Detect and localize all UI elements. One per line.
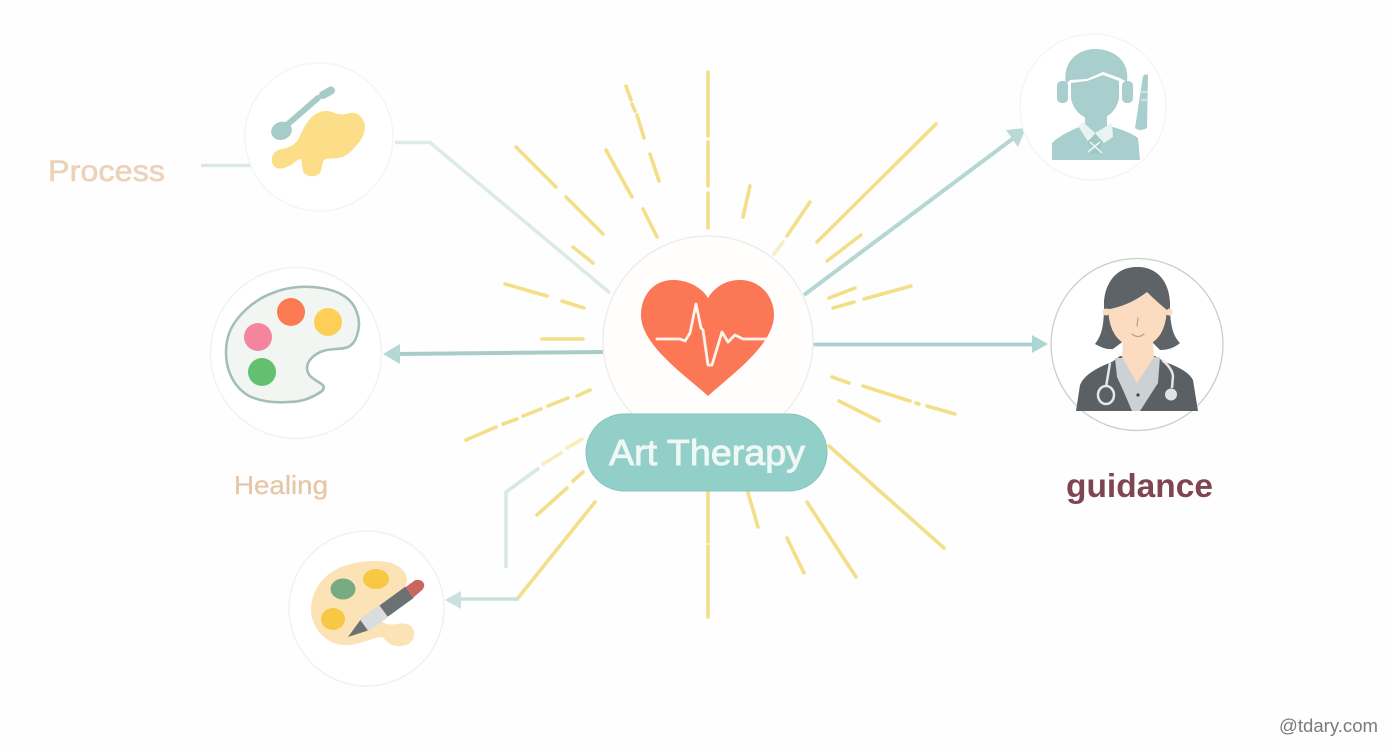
connector: elbow above brush palette [506,468,539,568]
face [1108,280,1167,348]
paint dots [244,298,342,386]
arrow: to doctor [813,335,1048,353]
sunburst rays [466,72,955,617]
shirt [1115,357,1160,411]
connector: process label to circle [201,164,250,167]
neck [1122,340,1154,383]
microphone [1135,74,1148,130]
stethoscope [1106,363,1110,387]
panel: process circle [245,63,393,211]
icon: paint blob [272,111,365,176]
panel: healing palette circle [210,268,382,438]
arrow: to brush palette [445,591,519,609]
panel: headset person circle [1020,34,1166,180]
watermark: @tdary.com [1279,716,1378,736]
arrow: to healing palette [383,344,603,364]
panel: brush palette circle [289,531,444,686]
connector: process to center [395,142,610,293]
icon: wooden palette [311,561,414,646]
icon: heart [641,280,774,396]
label: Process: Process [48,155,165,188]
icon: spoon [269,90,331,143]
icon: paint brush [344,576,428,643]
icon: palette [226,287,359,402]
hair back [1095,267,1180,350]
icon: headset person [1052,49,1148,160]
fringe [1104,267,1170,310]
paint dots [321,569,389,630]
panel: doctor circle [1051,258,1223,430]
center label pill [586,414,827,491]
icon: heartbeat line [657,304,768,365]
center hub: heart circle [603,236,813,446]
jacket [1076,356,1198,411]
arrow: to headset person [804,128,1026,295]
label: Healing: Healing [234,470,328,500]
title: Art Therapy [609,432,805,473]
nose and mouth [1132,318,1144,336]
collar [1078,122,1113,143]
label: guidance: guidance [1066,467,1213,504]
tie [1088,134,1102,154]
icon: doctor [1076,267,1198,411]
